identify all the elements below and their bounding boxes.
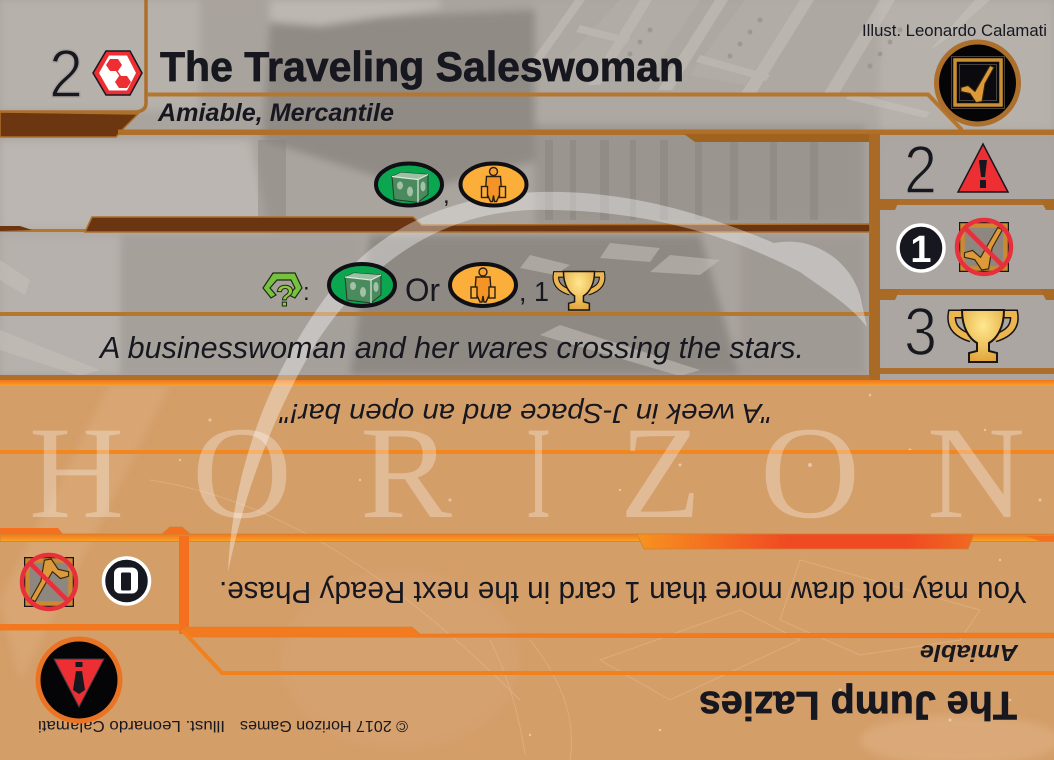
upside-down title: The Jump Lazies [699,683,1017,727]
ability row [263,264,602,313]
icon: trophy large [952,310,1014,362]
icon: red hexagon faction [93,51,142,95]
icon: green crate [329,264,395,306]
HORIZON watermark [29,399,1025,546]
icon: red warning triangle [958,144,1008,192]
icon: zero disc [104,558,150,604]
cost icon row [376,164,526,209]
card title: The Traveling Saleswoman [160,43,684,90]
word Or: Or [405,272,440,308]
icon: crossed check upside-down [22,555,76,609]
icon: round checkmark badge [936,42,1018,124]
letter O with swoosh: O [192,399,292,546]
letter H: H [29,399,124,546]
flavor text: A businesswoman and her wares crossing the stars. [98,330,804,365]
illustrator credit: Illust. Leonardo Calamati [862,21,1047,40]
stat: 1 no-check [898,220,1011,274]
stat: 3 trophies [904,294,1014,370]
icon: green question hexagon: ? [276,280,294,313]
upside-down copyright: © 2017 Horizon Games [240,717,408,734]
value text: , 1 [519,276,549,307]
letter R: R [360,399,452,546]
icon: warning badge upside-down [38,639,120,721]
upside-down flavor quote: "A week in J-Space and an open bar!" [279,398,772,429]
swoosh crescent [228,192,867,572]
icon: orange person [460,164,526,206]
letter N: N [927,399,1025,546]
upside-down ability text: You may not draw more than 1 card in the next Ready Phase. [219,575,1027,610]
colon: : [303,279,310,306]
icon: orange person [450,264,516,306]
card traits: Amiable, Mercantile [157,99,394,127]
top card background photo [0,0,1054,380]
upside-down traits: Amiable [920,640,1019,666]
stat: 2 warnings [904,132,1008,208]
bottom card background [0,380,1054,760]
letter O: O [760,399,860,546]
icon: trophy small [556,272,602,310]
bottom card frame lines [0,380,1054,673]
cost number: 2 [49,36,83,112]
letter Z: Z [620,399,701,546]
icon: green question hexagon [263,273,302,313]
icon: crossed check [957,220,1011,274]
number: 3 [904,294,937,370]
icon: number one disc: 1 [910,229,932,271]
icon: green crate [376,164,442,206]
letter I: I [526,399,551,546]
top card frame lines [0,0,1054,380]
comma: , [443,182,450,209]
upside-down illustrator credit: Illust. Leonardo Calamati [38,717,225,734]
number: 2 [904,132,937,208]
